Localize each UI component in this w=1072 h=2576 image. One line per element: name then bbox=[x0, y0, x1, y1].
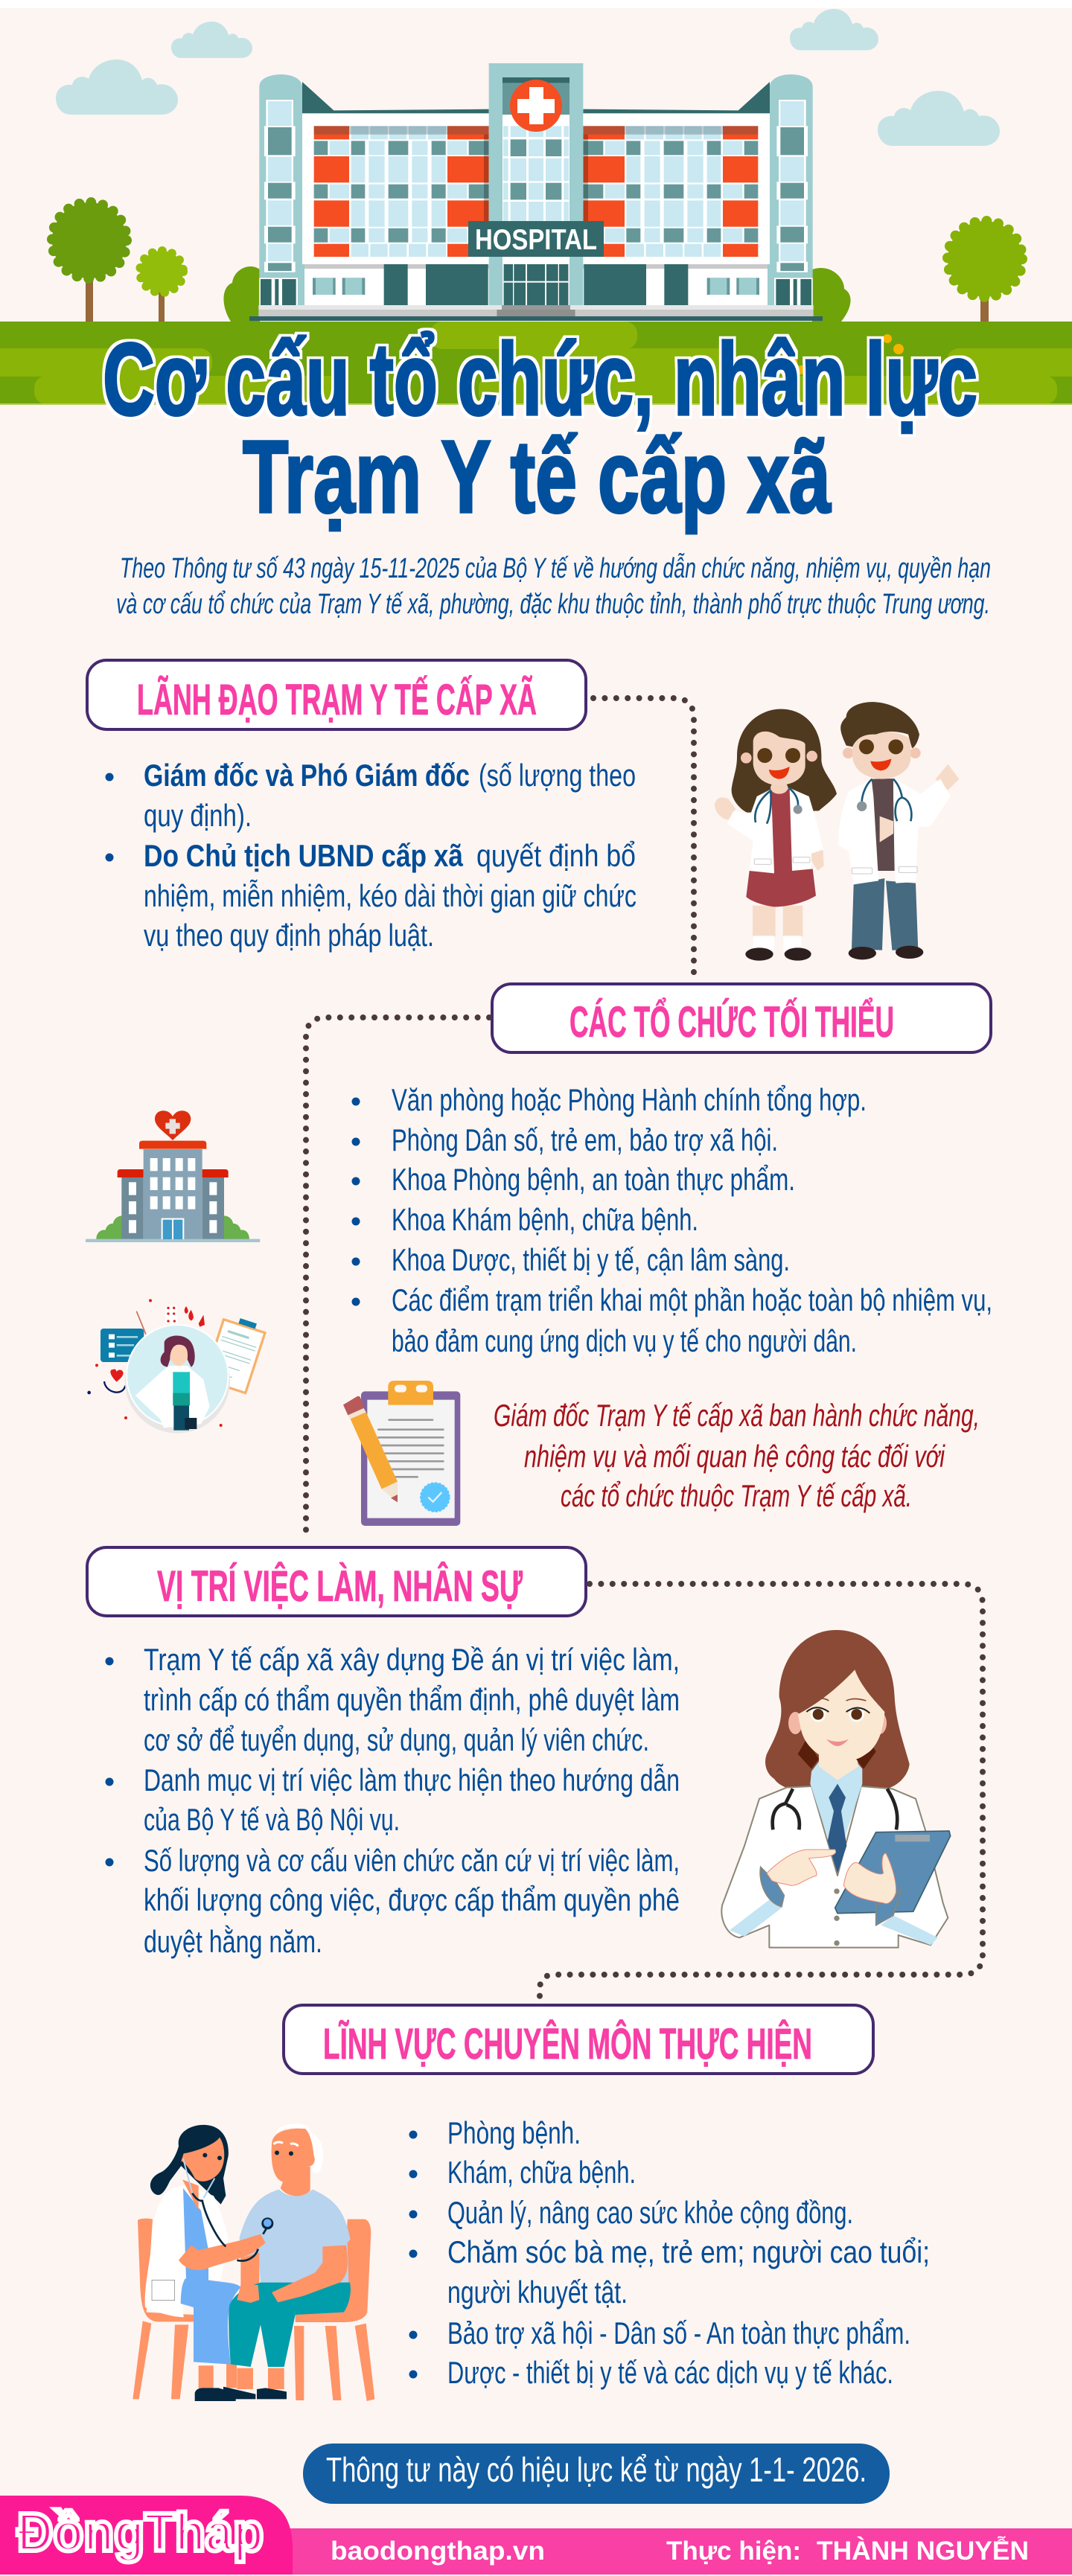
grass bbox=[0, 322, 1072, 405]
text block: organisations: bảo đảm cung ứng dịch vụ y tế cho người dân. bbox=[392, 1323, 857, 1358]
heading: fields bbox=[284, 2005, 873, 2074]
text block: fields: Chăm sóc bà mẹ, trẻ em; người cao tuổi; bbox=[447, 2234, 930, 2269]
heading: jobs: VỊ TRÍ VIỆC LÀM, NHÂN SỰ bbox=[157, 1562, 523, 1611]
icon: small hospital bbox=[86, 1110, 260, 1242]
title: Trạm Y tế cấp xã bbox=[243, 420, 832, 534]
callout: effective date: Thông tư này có hiệu lực kể từ ngày 1-1- 2026. bbox=[326, 2450, 867, 2489]
callout: director note bbox=[494, 1398, 980, 1513]
footer band: THÀNH NGUYỄN bbox=[817, 2536, 1029, 2566]
text block: fields: Bảo trợ xã hội - Dân số - An toàn thực phẩm. bbox=[447, 2315, 910, 2350]
text block: leadership: quyết định bổ bbox=[476, 838, 636, 873]
footer band: baodongthap.vn bbox=[331, 2537, 545, 2566]
text block: jobs: khối lượng công việc, được cấp thẩm quyền phê bbox=[144, 1882, 680, 1917]
text block: fields: Dược - thiết bị y tế và các dịch vụ y tế khác. bbox=[447, 2355, 893, 2390]
hospital building: HOSPITAL bbox=[475, 224, 597, 256]
heading: leadership bbox=[87, 660, 586, 729]
text block: fields: Khám, chữa bệnh. bbox=[447, 2155, 636, 2190]
trees bbox=[52, 202, 1022, 340]
text block: leadership: (số lượng theo bbox=[479, 758, 636, 793]
hospital building bbox=[249, 63, 823, 321]
text block: organisations: Khoa Dược, thiết bị y tế, cận lâm sàng. bbox=[392, 1242, 790, 1277]
text block: jobs: Trạm Y tế cấp xã xây dựng Đề án vị trí việc làm, bbox=[144, 1642, 680, 1677]
icon: doctor examining elderly patient bbox=[133, 2123, 374, 2401]
callout: director note: các tổ chức thuộc Trạm Y tế cấp xã. bbox=[561, 1478, 912, 1513]
text block: organisations: Khoa Phòng bệnh, an toàn thực phẩm. bbox=[392, 1162, 795, 1197]
text block: fields: Phòng bệnh. bbox=[447, 2115, 581, 2150]
connector: organisations to jobs bbox=[306, 1017, 489, 1538]
heading: jobs bbox=[87, 1547, 586, 1616]
connector: leadership to organisations bbox=[593, 698, 694, 981]
text block: leadership: Giám đốc và Phó Giám đốc bbox=[144, 758, 470, 793]
footer band bbox=[0, 2496, 1072, 2575]
text block: jobs: Số lượng và cơ cấu viên chức căn cứ vị trí việc làm, bbox=[144, 1843, 680, 1878]
text block: leadership: nhiệm, miễn nhiệm, kéo dài thời gian giữ chức bbox=[144, 878, 636, 913]
text block: fields: Quản lý, nâng cao sức khỏe cộng đồng. bbox=[447, 2195, 853, 2230]
title bbox=[103, 322, 977, 534]
icon: clipboard and pencil bbox=[343, 1381, 460, 1526]
text block: leadership bbox=[106, 758, 636, 953]
heading: leadership: LÃNH ĐẠO TRẠM Y TẾ CẤP XÃ bbox=[137, 676, 537, 724]
text block: fields bbox=[409, 2115, 930, 2390]
text block: leadership: Do Chủ tịch UBND cấp xã bbox=[144, 838, 464, 873]
text block: jobs: Danh mục vị trí việc làm thực hiện theo hướng dẫn bbox=[144, 1762, 680, 1797]
text block: organisations: Khoa Khám bệnh, chữa bệnh. bbox=[392, 1202, 698, 1237]
text block: fields: người khuyết tật. bbox=[447, 2275, 628, 2310]
shrubs bbox=[223, 266, 851, 322]
heading: organisations bbox=[492, 984, 991, 1052]
icon: medic in circle bbox=[87, 1299, 268, 1434]
clouds bbox=[56, 9, 1000, 146]
footer band: ĐồngTháp bbox=[17, 2503, 264, 2563]
intro text bbox=[116, 552, 991, 620]
text block: leadership: quy định). bbox=[144, 798, 252, 833]
heading: fields: LĨNH VỰC CHUYÊN MÔN THỰC HIỆN bbox=[323, 2020, 812, 2068]
text block: organisations: Phòng Dân số, trẻ em, bảo trợ xã hội. bbox=[392, 1122, 778, 1157]
text block: jobs bbox=[106, 1642, 680, 1959]
text block: jobs: trình cấp có thẩm quyền thẩm định, phê duyệt làm bbox=[144, 1682, 680, 1717]
text block: organisations: Văn phòng hoặc Phòng Hành chính tổng hợp. bbox=[392, 1082, 867, 1117]
text block: jobs: của Bộ Y tế và Bộ Nội vụ. bbox=[144, 1802, 400, 1837]
connector: jobs to fields bbox=[540, 1584, 983, 2001]
text block: jobs: cơ sở để tuyển dụng, sử dụng, quản lý viên chức. bbox=[144, 1722, 649, 1757]
footer band: Thực hiện: bbox=[666, 2537, 801, 2566]
icon: female doctor with clipboard bbox=[721, 1630, 951, 1948]
callout: effective date bbox=[303, 2444, 890, 2504]
text block: jobs: duyệt hằng năm. bbox=[144, 1924, 322, 1959]
icon: two doctors bbox=[715, 702, 959, 961]
text block: leadership: vụ theo quy định pháp luật. bbox=[144, 918, 434, 953]
text block: organisations bbox=[351, 1082, 992, 1358]
